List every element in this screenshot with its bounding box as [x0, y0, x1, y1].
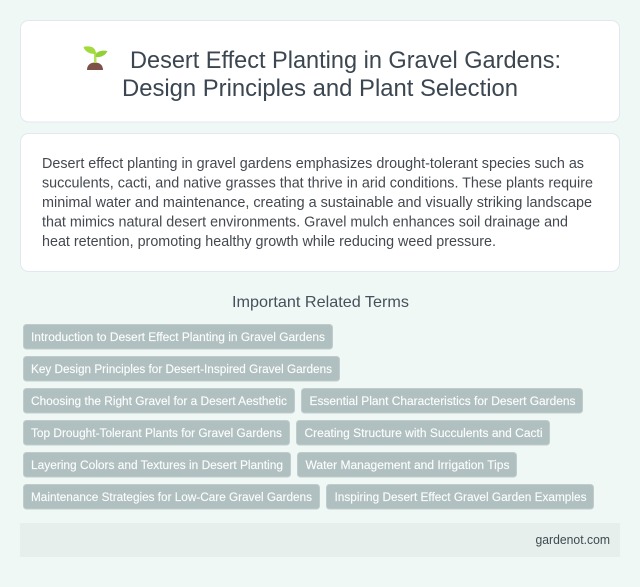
tag: [302, 388, 582, 413]
tag: Choosing the Right Gravel for a Desert Aesthetic: [31, 394, 287, 408]
tag: Creating Structure with Succulents and Cacti: [304, 426, 542, 440]
tag: Essential Plant Characteristics for Desert Gardens: [310, 394, 576, 408]
tag: [24, 484, 320, 509]
tag: Layering Colors and Textures in Desert Planting: [31, 458, 283, 472]
tag: Water Management and Irrigation Tips: [306, 458, 510, 472]
tag: [24, 388, 294, 413]
tag: Key Design Principles for Desert-Inspired Gravel Gardens: [31, 362, 332, 376]
icon: seedling: [84, 46, 108, 70]
intro paragraph: Desert effect planting in gravel gardens emphasizes drought-tolerant species such as: [42, 156, 584, 172]
tag: [24, 420, 290, 445]
tag: [298, 452, 516, 477]
tag: [24, 452, 290, 477]
intro paragraph: heat retention, promoting healthy growth while reducing weed pressure.: [42, 234, 496, 250]
tag: [326, 484, 594, 509]
footer: [20, 523, 620, 557]
intro paragraph: succulents, cacti, and native grasses that thrive in arid conditions. These plants require: [42, 176, 593, 192]
tag: [24, 324, 332, 349]
tag: Maintenance Strategies for Low-Care Gravel Gardens: [31, 490, 312, 504]
title: Desert Effect Planting in Gravel Gardens:: [130, 47, 561, 74]
tag: [296, 420, 550, 445]
intro paragraph: that mimics natural desert environments. Gravel mulch enhances soil drainage and: [42, 214, 568, 230]
tag: Top Drought-Tolerant Plants for Gravel Gardens: [31, 426, 282, 440]
title: [122, 47, 561, 102]
tag: Inspiring Desert Effect Gravel Garden Examples: [334, 490, 586, 504]
tag list: [24, 324, 594, 509]
tag: [24, 356, 340, 381]
panel: intro text card: [20, 134, 620, 272]
title: Design Principles and Plant Selection: [122, 75, 518, 102]
heading: related terms: Important Related Terms: [232, 294, 409, 311]
panel: title card: [20, 20, 620, 122]
intro paragraph: [42, 156, 593, 250]
footer: gardenot.com: [536, 532, 610, 547]
intro paragraph: minimal water and maintenance, creating a sustainable and visually striking landscape: [42, 195, 592, 211]
tag: Introduction to Desert Effect Planting in Gravel Gardens: [31, 330, 325, 344]
